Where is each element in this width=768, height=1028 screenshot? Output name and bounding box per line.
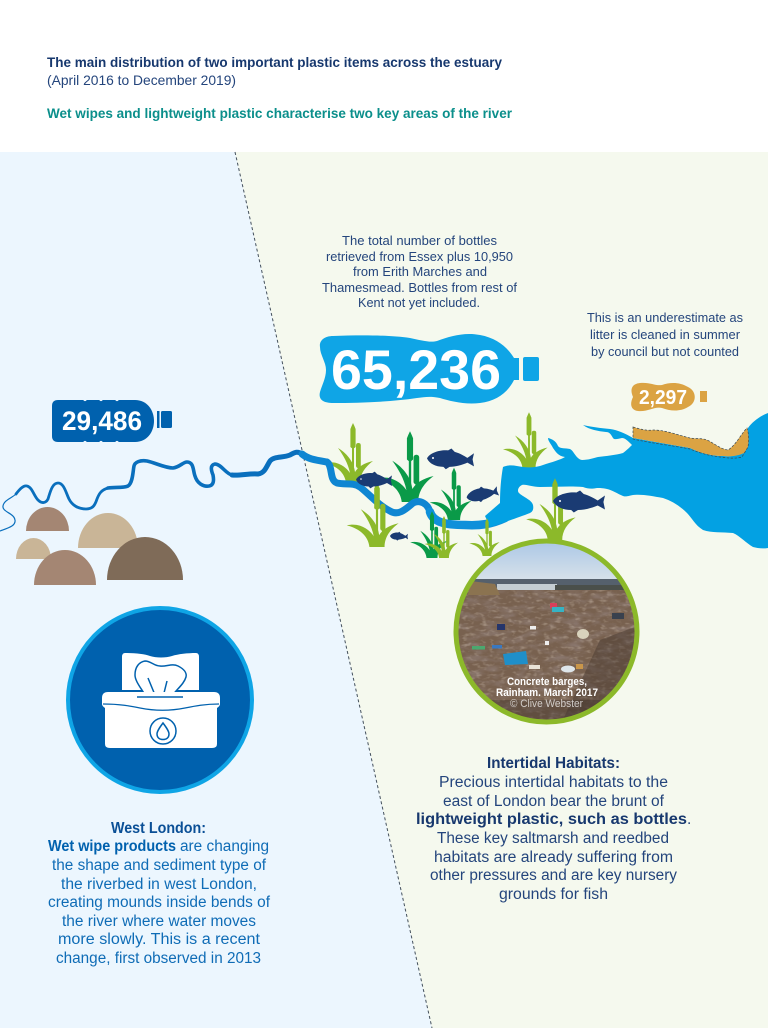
text: West London	[48, 820, 271, 967]
heading: West London:	[111, 820, 206, 837]
date range: (April 2016 to December 2019)	[47, 72, 236, 88]
note: bottle total explanation: The total number of bottles	[342, 233, 497, 248]
note: bottle total explanation: retrieved from Essex plus 10,950	[326, 249, 513, 264]
bottle: 65,236: 65,236	[331, 338, 501, 401]
text: West London: more slowly. This is a recent	[58, 931, 261, 948]
text: West London: creating mounds inside bends of	[48, 894, 271, 911]
panel: west London background	[0, 152, 432, 1028]
note: bottle total explanation: from Erith Marches and	[353, 264, 487, 279]
photo ring	[456, 541, 637, 722]
text: West London: the shape and sediment type of	[52, 857, 267, 874]
estuary	[485, 413, 768, 548]
subheading: Wet wipes and lightweight plastic characterise two key areas of the river	[47, 105, 513, 121]
fish	[356, 449, 605, 541]
panel: intertidal habitats background	[235, 152, 768, 1028]
photo: concrete barges, Rainham	[454, 539, 640, 726]
note: underestimate: litter is cleaned in summer	[590, 327, 741, 342]
text: Intertidal Habitats: east of London bear the brunt of	[443, 793, 665, 810]
text: West London: are changing	[180, 838, 269, 855]
note: underestimate	[587, 310, 743, 359]
bottle: 29,486: 29,486	[62, 406, 142, 436]
photo caption: Concrete barges,	[507, 676, 587, 688]
heading: Intertidal Habitats:	[487, 755, 620, 772]
heading: The main distribution of two important plastic items across the estuary	[47, 54, 502, 70]
note: underestimate: This is an underestimate as	[587, 310, 743, 325]
text: Intertidal Habitats: Precious intertidal habitats to the	[439, 774, 668, 791]
text: West London: the riverbed in west London,	[61, 876, 257, 893]
text: Intertidal Habitats: lightweight plastic, such as bottles	[416, 811, 687, 828]
photo: concrete barges, Rainham: Rainham. March 2017	[496, 687, 598, 699]
reeds in front of the river	[347, 478, 576, 558]
photo: concrete barges, Rainham: © Clive Webster	[510, 698, 583, 710]
bottle: 29,486	[52, 398, 172, 444]
bottle: 2,297	[631, 383, 707, 411]
text: West London: Wet wipe products	[48, 838, 176, 855]
text: Intertidal Habitats: habitats are already suffering from	[434, 849, 673, 866]
divider between river zones	[235, 152, 432, 1028]
icon: wet wipes packet	[68, 608, 252, 792]
wipe	[135, 661, 186, 696]
mounds of wet wipes on riverbed	[16, 507, 183, 585]
pack lid and body	[102, 692, 220, 748]
text: West London: change, first observed in 2013	[56, 950, 261, 967]
river Thames	[0, 452, 505, 531]
text: Intertidal Habitats	[416, 755, 691, 903]
note: bottle total explanation	[322, 233, 517, 310]
droplet badge	[150, 718, 176, 744]
text: Intertidal Habitats: These key saltmarsh and reedbed	[437, 830, 669, 847]
note: bottle total explanation: Thamesmead. Bottles from rest of	[322, 280, 517, 295]
bottle: 2,297: 2,297	[639, 387, 687, 409]
note: bottle total explanation: Kent not yet included.	[358, 295, 480, 310]
reeds behind the river	[325, 412, 548, 520]
note: underestimate: by council but not counted	[591, 344, 739, 359]
sand section of Kent shore	[633, 427, 749, 458]
text: West London: the river where water moves	[62, 913, 256, 930]
text: Intertidal Habitats: other pressures and are key nursery	[430, 867, 677, 884]
title block	[47, 54, 513, 121]
text: Intertidal Habitats: grounds for fish	[499, 886, 608, 903]
pack back	[122, 653, 199, 690]
text: Intertidal Habitats: .	[687, 811, 691, 828]
